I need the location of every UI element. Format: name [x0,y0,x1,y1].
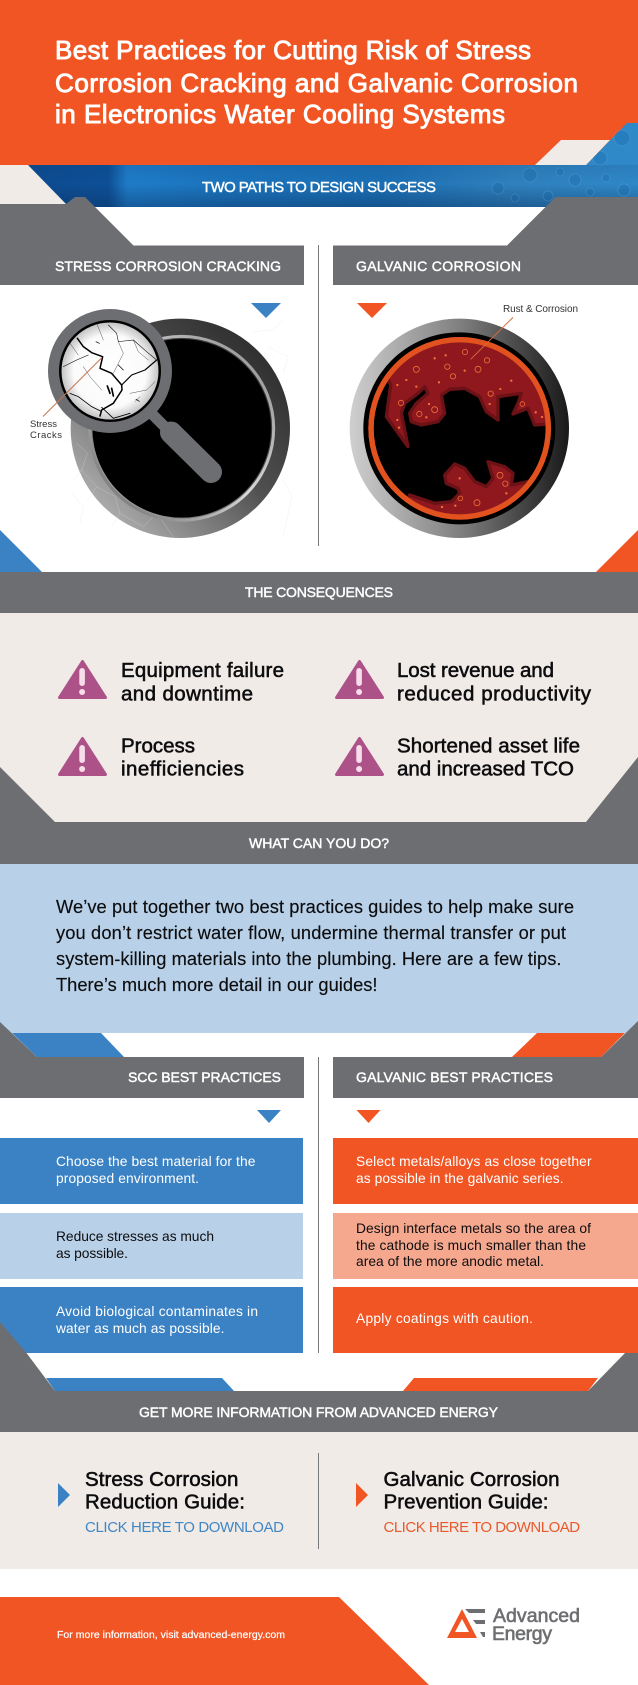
section header: galvanic best practices: GALVANIC BEST PRACTICES [356,1069,553,1085]
tip: design interface metals: the cathode is much smaller than the [356,1238,586,1253]
corner accent: orange [596,530,638,572]
tip: avoid biological contaminates [0,1287,303,1353]
panel: intro text: There’s much more detail in our guides! [56,974,378,995]
banner: two paths to design success [0,123,638,207]
band: get more information [0,1391,638,1432]
header panel [0,0,638,165]
guide: stress corrosion reduction: Reduction Guide: [85,1490,245,1514]
tip: choose best material [0,1138,303,1204]
icon: blue down marker [257,1110,281,1123]
guide: galvanic corrosion prevention: Galvanic Corrosion [384,1468,560,1491]
band: the consequences [0,572,638,613]
tip: design interface metals: area of the more anodic metal. [356,1254,544,1269]
illustration: corroded pipe [350,304,578,547]
consequence: equipment failure: and downtime [121,682,253,706]
guide: stress corrosion reduction [58,1468,284,1536]
callout: stress cracks [30,358,102,441]
tip: apply coatings [333,1287,638,1353]
tip: design interface metals: Design interface metals so the area of [356,1221,591,1236]
consequence: shortened asset life [336,734,580,780]
band: get more information: GET MORE INFORMATION FROM ADVANCED ENERGY [139,1404,499,1420]
rust patches [384,342,546,514]
guide: galvanic corrosion prevention [356,1468,580,1536]
section header: galvanic best practices [333,1057,638,1098]
callout: rust and corrosion: Rust & Corrosion [503,304,578,315]
consequence: equipment failure [60,659,284,706]
title: Best Practices for Cutting Risk of Stress [55,35,531,65]
logo: advanced energy: Advanced [493,1605,580,1627]
tip: reduce stresses: Reduce stresses as much [56,1229,214,1244]
section header: scc best practices [0,1057,304,1098]
tip: reduce stresses: as possible. [56,1246,128,1261]
band: what can you do: WHAT CAN YOU DO? [249,835,389,851]
guide: galvanic corrosion prevention: CLICK HERE TO DOWNLOAD [384,1519,580,1536]
section header: stress corrosion cracking [0,197,304,285]
band: what can you do [0,822,638,864]
consequence: lost revenue: reduced productivity [397,682,592,706]
guide: stress corrosion reduction: CLICK HERE TO DOWNLOAD [85,1519,284,1536]
tip: select metals: as possible in the galvanic series. [356,1171,564,1186]
title [55,35,578,129]
consequence: process inefficiencies: Process [121,734,195,758]
panel: intro text: you don’t restrict water flow, undermine thermal transfer or put [56,922,566,943]
title: Corrosion Cracking and Galvanic Corrosion [55,68,578,98]
consequence: process inefficiencies [60,734,244,780]
consequence: process inefficiencies: inefficiencies [121,758,244,780]
tip: choose best material: proposed environment. [56,1171,199,1186]
guide: galvanic corrosion prevention: Prevention Guide: [384,1490,548,1514]
consequence: lost revenue [336,659,592,706]
title: in Electronics Water Cooling Systems [55,99,505,129]
tip: reduce stresses [0,1213,303,1279]
tip: select metals [333,1138,638,1204]
chevrons above more information [0,1322,638,1391]
icon: magnifier [48,309,211,472]
consequence: lost revenue: Lost revenue and [397,659,554,682]
chevrons above best practices [0,1021,638,1057]
section header: stress corrosion cracking: STRESS CORROSION CRACKING [55,258,281,274]
band: the consequences: THE CONSEQUENCES [245,584,393,600]
panel: intro text [0,864,638,1033]
guide: stress corrosion reduction: Stress Corrosion [85,1468,238,1491]
logo: advanced energy [447,1605,580,1645]
section header: galvanic corrosion [333,197,638,285]
tip: design interface metals [333,1213,638,1279]
consequence: shortened asset life: and increased TCO [397,758,574,780]
tip: select metals: Select metals/alloys as close together [356,1154,592,1169]
tip: apply coatings: Apply coatings with caution. [356,1311,533,1326]
footer panel: For more information, visit advanced-energy.com [57,1629,285,1641]
corner accent: blue [0,530,42,572]
logo: advanced energy: Energy [492,1623,552,1645]
section header: scc best practices: SCC BEST PRACTICES [128,1069,281,1085]
tip: avoid biological contaminates: Avoid biological contaminates in [56,1304,258,1319]
illustration: cracked pipe with magnifier [30,309,292,538]
footer panel [0,1597,429,1685]
icon: blue down marker [251,303,281,318]
callout: stress cracks: Cracks [30,430,62,441]
section header: galvanic corrosion: GALVANIC CORROSION [356,258,521,274]
panel: consequences [0,613,638,822]
panel: intro text: system-killing materials into the plumbing. Here are a few tips. [56,948,562,969]
callout: stress cracks: Stress [30,419,57,430]
icon: orange down marker [356,1110,380,1123]
tip: choose best material: Choose the best material for the [56,1154,256,1169]
consequence: shortened asset life: Shortened asset life [397,734,580,758]
icon: orange down marker [357,303,387,318]
tip: avoid biological contaminates: water as much as possible. [55,1321,224,1336]
panel: intro text: We’ve put together two best practices guides to help make sure [56,896,574,917]
banner heading: TWO PATHS TO DESIGN SUCCESS [202,179,436,196]
consequence: equipment failure: Equipment failure [121,659,284,682]
panel: guides [0,1432,638,1569]
